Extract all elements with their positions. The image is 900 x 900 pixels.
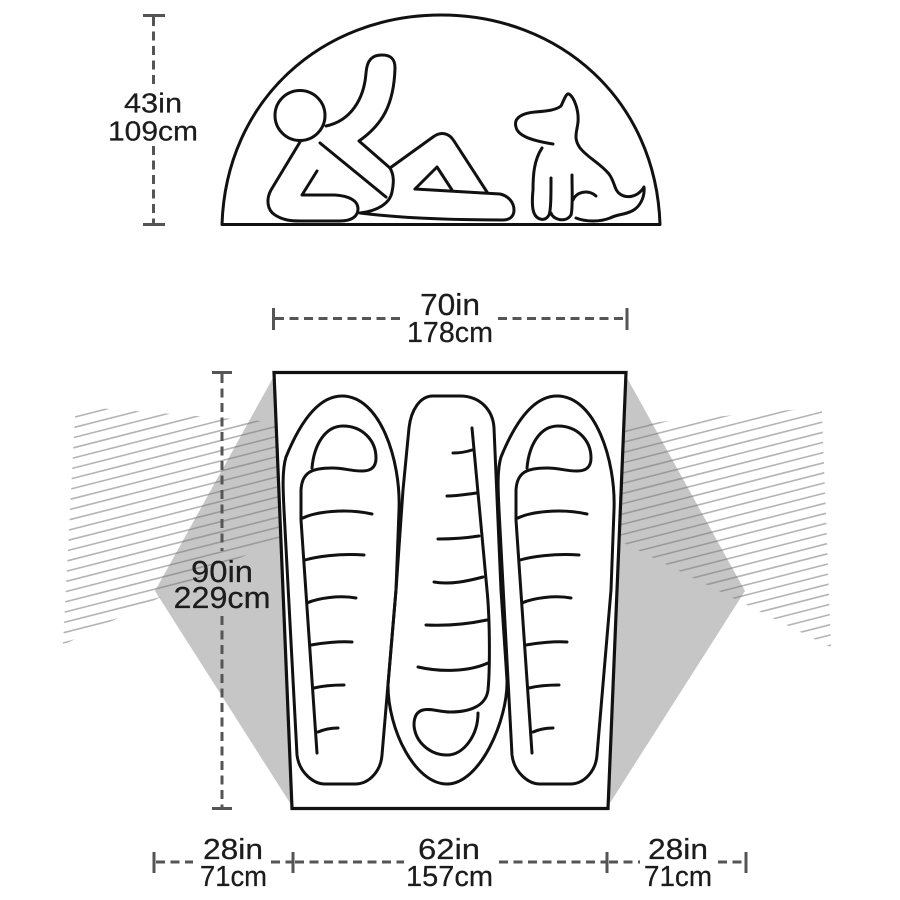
- tent side profile: [222, 15, 660, 224]
- dimension: width 70in 178cm: [274, 287, 627, 349]
- dimension: height 43in 109cm: 43in: [124, 88, 182, 118]
- left sleeping bag: [283, 396, 399, 784]
- icon: sitting dog: [515, 94, 644, 221]
- left vestibule fill: [155, 376, 300, 803]
- floor plan with vestibules: [63, 364, 831, 808]
- dimension: length 90in 229cm: 90in: [191, 554, 253, 589]
- dimension: width 70in 178cm: 178cm: [407, 317, 493, 349]
- dimension: height 43in 109cm: [108, 16, 198, 224]
- dimension: left vestibule 28in 71cm: [154, 834, 292, 893]
- dimension: right vestibule 28in 71cm: 28in: [648, 834, 708, 866]
- dimension: right vestibule 28in 71cm: [609, 834, 746, 893]
- dimension: left vestibule 28in 71cm: 28in: [203, 834, 263, 866]
- dome outline: [222, 15, 660, 224]
- tent floor outline: [274, 372, 626, 808]
- dimension: left vestibule 28in 71cm: 71cm: [200, 861, 267, 893]
- dimension: floor width 62in 157cm: [293, 834, 607, 893]
- left rainfly hatching: [62, 408, 280, 644]
- right vestibule fill: [600, 376, 745, 803]
- dimension: length 90in 229cm: [174, 372, 270, 808]
- dimension: floor width 62in 157cm: 62in: [418, 834, 480, 866]
- right rainfly hatching: [620, 410, 832, 646]
- icon: reclining person: [268, 55, 514, 221]
- dimension: height 43in 109cm: 109cm: [108, 116, 198, 146]
- dimension: width 70in 178cm: 70in: [420, 287, 480, 322]
- dimension: floor width 62in 157cm: 157cm: [406, 861, 493, 893]
- dimension: right vestibule 28in 71cm: 71cm: [644, 861, 712, 893]
- dimension: length 90in 229cm: 229cm: [174, 580, 270, 615]
- center sleeping bag: [388, 396, 507, 784]
- right sleeping bag: [498, 396, 614, 784]
